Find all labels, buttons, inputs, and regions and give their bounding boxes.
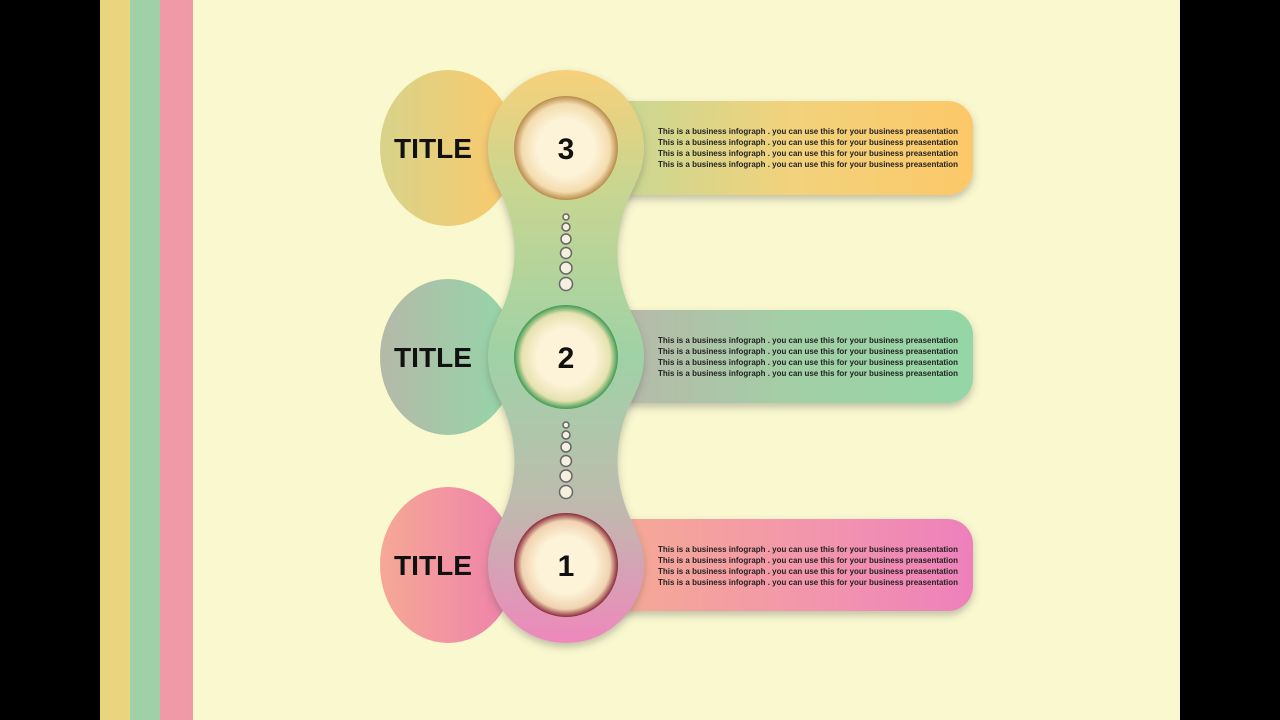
number circle 3: 3 bbox=[558, 133, 574, 166]
number circle 1 bbox=[514, 513, 618, 617]
dots 3-2 bbox=[560, 214, 572, 290]
banner 1: This is a business infograph . you can use this for your business preasentation bbox=[658, 577, 958, 587]
number circle 2: 2 bbox=[558, 342, 574, 375]
banner 3: This is a business infograph . you can use this for your business preasentation bbox=[658, 148, 958, 158]
banner 1 bbox=[610, 519, 973, 611]
title circle 3 bbox=[380, 70, 516, 226]
number circle 3 bbox=[514, 96, 618, 200]
title circle 3: TITLE bbox=[394, 133, 472, 164]
title circle 1: TITLE bbox=[394, 550, 472, 581]
number circle 2 bbox=[514, 305, 618, 409]
banner 2: This is a business infograph . you can use this for your business preasentation bbox=[658, 335, 958, 345]
banner 2: This is a business infograph . you can use this for your business preasentation bbox=[658, 346, 958, 356]
decorative stripes bbox=[100, 0, 193, 720]
banner 3: This is a business infograph . you can use this for your business preasentation bbox=[658, 137, 958, 147]
banner 2: This is a business infograph . you can use this for your business preasentation bbox=[658, 368, 958, 378]
banner 2: This is a business infograph . you can use this for your business preasentation bbox=[658, 357, 958, 367]
title circle 2 bbox=[380, 279, 516, 435]
title circle 1 bbox=[380, 487, 516, 643]
banner 3 bbox=[610, 101, 973, 195]
spine connector bbox=[488, 70, 644, 643]
banner 2 bbox=[610, 310, 973, 403]
dots 2-1 bbox=[560, 422, 572, 498]
banner 1: This is a business infograph . you can use this for your business preasentation bbox=[658, 555, 958, 565]
title circle 2: TITLE bbox=[394, 342, 472, 373]
number circle 1: 1 bbox=[558, 550, 574, 583]
banner 3: This is a business infograph . you can use this for your business preasentation bbox=[658, 126, 958, 136]
banner 1: This is a business infograph . you can use this for your business preasentation bbox=[658, 566, 958, 576]
banner 1: This is a business infograph . you can use this for your business preasentation bbox=[658, 544, 958, 554]
banner 3: This is a business infograph . you can use this for your business preasentation bbox=[658, 159, 958, 169]
